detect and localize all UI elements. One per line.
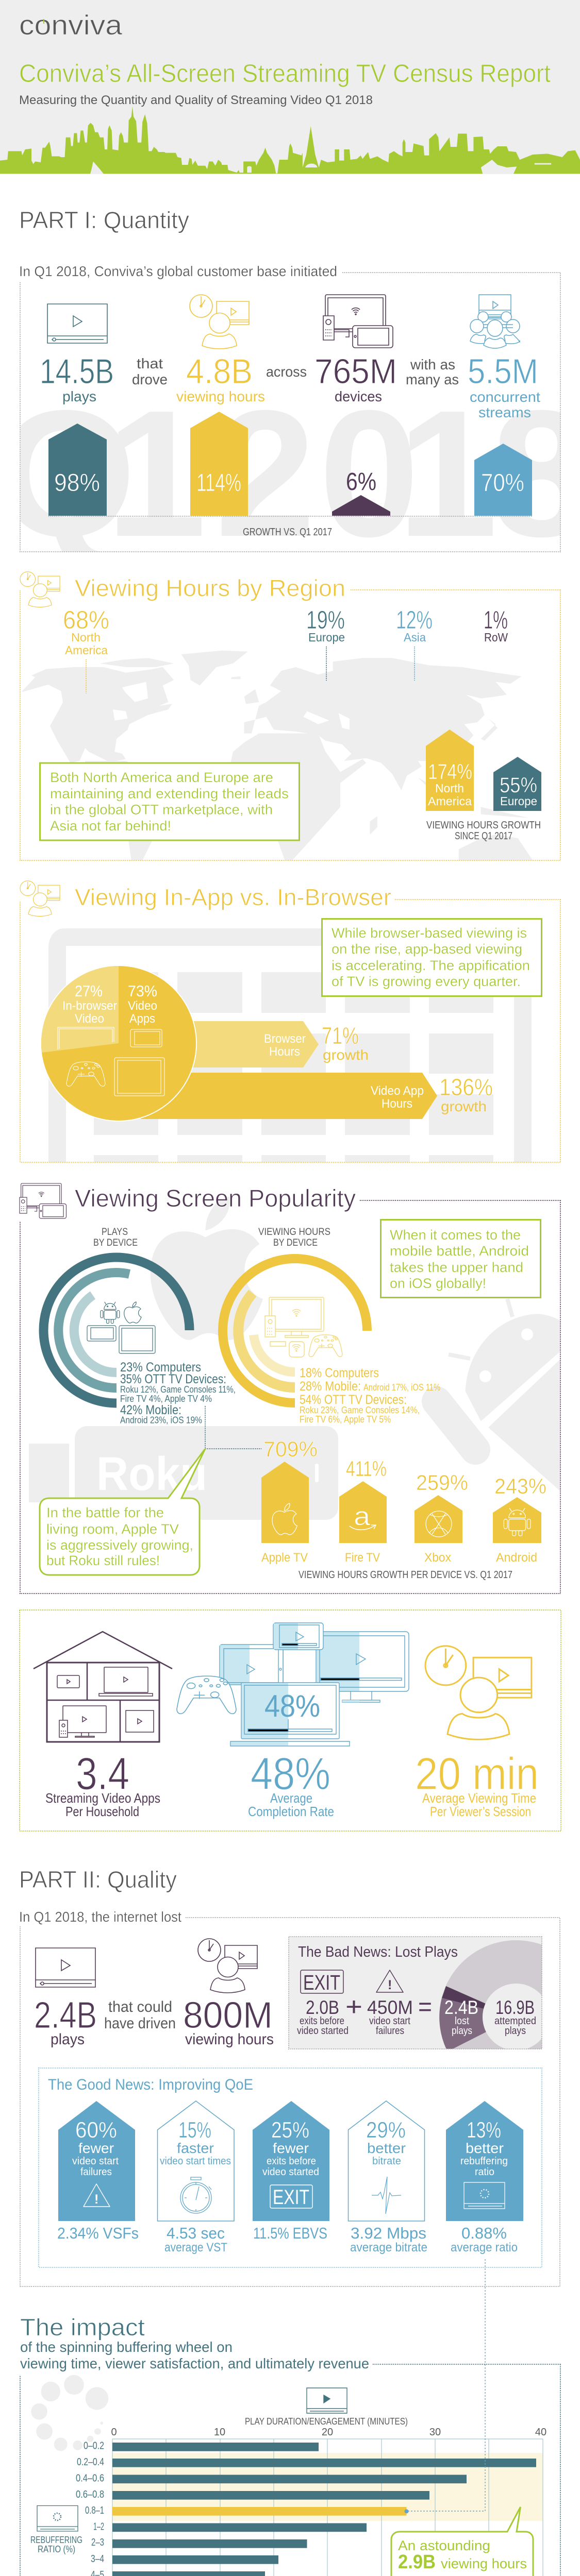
header background and skyline [0,0,580,174]
equation: attempted [494,2015,536,2027]
section heading: viewing time, viewer satisfaction, and ultimately revenue [20,2355,369,2371]
stat: apps per household: 3.4 [76,1748,129,1799]
callout [322,919,541,996]
connecting words: with as [410,357,455,372]
device icons [87,1302,155,1353]
legend: 23% Computers [120,1360,201,1375]
region: north america: 68% [63,606,109,634]
callout: roku: In the battle for the [46,1505,164,1520]
equation: exits before [300,2015,344,2027]
chart: viewing hours by device: BY DEVICE [273,1238,318,1248]
caption: VIEWING HOURS GROWTH PER DEVICE VS. Q1 2017 [299,1569,512,1581]
stat row: 14.5B [40,352,114,391]
region: europe: 19% [306,606,345,634]
metric: bitrate: 29% [366,2117,406,2143]
connector from good news to chart [404,2259,485,2513]
title: Conviva’s All-Screen Streaming TV Census Report [19,60,551,88]
callout: roku: living room, Apple TV [46,1521,179,1537]
growth arrows: Europe [500,794,537,808]
growth: android: Android [496,1551,537,1565]
stat labels: streams [478,404,531,420]
callout: roku [40,1449,205,1575]
icon: blue device cluster at 48 percent [177,1623,409,1746]
legend: Android 17%, iOS 11% [363,1382,440,1393]
icon: house with screens [34,1632,172,1742]
panel: viewing hours by region [20,572,560,860]
callout: viewing hours [441,2556,527,2571]
legend: 35% OTT TV Devices: [120,1372,226,1386]
metric: rebuffering ratio: ratio [475,2166,494,2178]
callout: 2.9B [398,2551,436,2573]
pie chart: in-app vs in-browser [40,965,197,1122]
caption: SINCE Q1 2017 [455,831,512,842]
equation: 2.0B [306,1997,339,2018]
callout: of TV is growing every quarter. [332,974,521,989]
metric: rebuffering ratio: 13% [467,2117,501,2143]
watermark: Q1 2018: 0 [319,373,419,574]
metric: video start times: average VST [164,2241,227,2255]
axis labels [111,2427,546,2438]
icons in pie [58,1027,164,1096]
stat: lost plays and hours: 800M [183,1995,273,2036]
metric: exits before video started: fewer [273,2140,309,2156]
connecting words: drove [132,371,168,387]
heading: part 1: PART I: Quantity [19,207,189,233]
legend [300,1366,440,1425]
axis labels: 40 [535,2427,546,2438]
metric: rebuffering ratio: average ratio [451,2241,518,2255]
icon: clock and viewer [190,295,249,349]
callout [40,763,299,840]
growth: xbox: 259% [416,1470,468,1495]
growth arrows [48,412,532,516]
metric: video start times: video start times [160,2156,231,2167]
conviva logo: conviva [19,10,123,41]
growth arrows: 114% [196,469,241,497]
legend [120,1360,236,1425]
metric: video start failures: ! [94,2192,98,2207]
background: android [437,1299,566,1496]
background: roku [29,1426,338,1520]
metric: video start failures: 2.34% VSFs [57,2224,139,2242]
legend: 18% Computers [300,1366,379,1380]
stat row [40,352,538,391]
row labels: 0–0.2 [84,2440,104,2451]
stat: lost plays and hours: that could [108,1998,172,2015]
callout: android [380,1220,540,1297]
metric: rebuffering ratio: 0.88% [461,2224,507,2242]
watermark: Q1 2018: 2 [216,373,316,574]
metric: video start failures: 60% [75,2117,117,2143]
stat: viewing time: 20 min [415,1748,539,1799]
world map [22,651,533,860]
section heading [20,2314,369,2371]
growth: android: 243% [494,1474,546,1498]
subtitle: Measuring the Quantity and Quality of Streaming Video Q1 2018 [19,93,373,107]
bar: video app hours: 136% [439,1074,493,1100]
callout: android: mobile battle, Android [390,1243,529,1259]
axis labels: 20 [322,2427,333,2438]
stat: lost plays and hours: 2.4B [34,1995,97,2036]
stat: viewing time: Per Viewer’s Session [430,1804,531,1819]
connecting words: across [266,364,307,380]
legend: Fire TV 6%, Apple TV 5% [300,1414,391,1425]
icon: concurrent viewers [470,295,520,348]
row labels: 0.2–0.4 [77,2456,104,2468]
metric: video start failures: fewer [78,2140,114,2156]
icon: play screen [307,2388,347,2413]
region: rest of world [484,606,508,644]
row labels: 0.4–0.6 [76,2473,104,2484]
watermark: Q1 2018 [21,410,560,552]
pie chart: in-app vs in-browser: Apps [129,1012,155,1026]
icon: exit sign: EXIT [303,1971,340,1994]
metric: exits before video started: EXIT [273,2186,309,2209]
bar: browser hours: growth [323,1047,369,1063]
growth: apple tv: Apple TV [261,1551,308,1565]
metric: video start times [158,2101,234,2255]
region: asia [396,606,433,681]
icon: buffering screen [37,2506,78,2531]
metric: bitrate: average bitrate [350,2241,427,2255]
equation: video start [369,2015,410,2027]
legend: 28% Mobile: [300,1379,361,1394]
region: north america: North [71,631,101,644]
equation: plays [505,2025,526,2037]
growth: fire tv [339,1456,387,1565]
bar: video app hours: Video App [371,1084,424,1098]
stat labels: plays [62,388,96,404]
metric: video start failures: video start [72,2156,119,2167]
bar: browser hours: Hours [269,1045,300,1059]
icon: clock and viewer [198,1939,257,1993]
callout [391,2507,533,2576]
pie chart: in-app vs in-browser: In-browser [62,999,117,1013]
metric: video start times: faster [177,2140,214,2156]
pie chart: in-app vs in-browser: 27% [75,982,103,1000]
equation: 16.9B [495,1997,535,2018]
bar: browser hours: Browser [264,1032,306,1046]
row labels: 0.6–0.8 [76,2489,104,2500]
growth: fire tv: 411% [346,1456,387,1481]
icon: warning [376,1970,403,1992]
row labels: 2–3 [91,2537,104,2548]
legend: Fire TV 4%, Apple TV 4% [120,1394,212,1404]
metric: exits before video started [253,2101,329,2242]
stat: apps per household: Per Household [65,1804,139,1819]
stat row: 765M [314,352,397,391]
watermark: Q1 2018: 1 [106,373,206,574]
section heading: Viewing Hours by Region [75,575,345,601]
city skyline [0,107,580,174]
growth arrows: 98% [54,469,100,497]
panel: bad news [288,1936,542,2049]
stat: completion rate: Average [270,1790,312,1806]
stat labels: concurrent [470,389,540,405]
equation: video started [297,2025,349,2037]
axis title: PLAY DURATION/ENGAGEMENT (MINUTES) [245,2416,408,2427]
bars [112,2443,536,2576]
heading: part 2: PART II: Quality [19,1866,177,1893]
stat: viewing time: Average Viewing Time [422,1790,536,1806]
stat row: 4.8B [186,352,253,391]
legend: 42% Mobile: [120,1403,181,1417]
icon: clock and viewer [20,881,60,916]
background logos [29,1196,566,1520]
stat: viewing time [415,1748,539,1819]
equation: 2.4B [444,1997,478,2018]
equation: failures [376,2025,404,2037]
growth: apple tv [261,1437,318,1565]
stat: lost plays and hours [34,1995,274,2048]
growth arrows: North [435,782,464,795]
metric: exits before video started: video started [262,2166,319,2178]
panel: good news: The Good News: Improving QoE [48,2076,253,2093]
equation [297,1992,536,2037]
panel: internet lost [19,1909,580,2286]
callout: roku: but Roku still rules! [46,1553,160,1568]
stat labels [62,388,540,420]
pie chart: in-app vs in-browser: 73% [128,982,157,1000]
callout: android: on iOS globally! [390,1276,486,1291]
icon: clock and viewer [20,572,60,607]
stat: lost plays and hours: plays [51,2031,85,2048]
background: apple [151,1196,263,1340]
region: asia: 12% [396,606,433,634]
growth: fire tv: a [354,1502,370,1531]
metric: rebuffering ratio: rebuffering [460,2156,508,2167]
chart: viewing hours by device [223,1227,440,1425]
panel: the impact of buffering [20,2259,560,2576]
metric: exits before video started: 25% [271,2117,309,2143]
equation: + [345,1992,362,2021]
stat: lost plays and hours: viewing hours [185,2031,274,2048]
metric: exits before video started: 11.5% EBVS [253,2224,327,2242]
growth: android [493,1474,546,1565]
chart: plays by device: BY DEVICE [93,1238,138,1248]
growth arrows: 55% [500,773,537,797]
legend: Android 23%, iOS 19% [120,1415,202,1425]
section heading: The impact [20,2314,145,2341]
icon: devices [323,295,393,348]
region: europe: Europe [308,631,345,644]
callout: is accelerating. The appification [332,958,530,973]
bar: video app hours: growth [441,1098,487,1114]
legend: Roku 12%, Game Consoles 11%, [120,1384,236,1395]
legend: 54% OTT TV Devices: [300,1393,407,1407]
bar: video app hours [141,1073,493,1119]
stat: completion rate [248,1748,334,1819]
equation: 450M [367,1997,413,2018]
stat labels: devices [335,388,382,404]
growth arrows: 174% [428,759,472,784]
chart: viewing hours by device: VIEWING HOURS [258,1227,330,1238]
caption [426,820,541,842]
growth arrows [426,730,541,811]
caption: VIEWING HOURS GROWTH [426,820,541,831]
growth arrows: America [428,794,472,808]
chart: plays by device: PLAYS [102,1227,128,1238]
stat: completion rate: 48% [251,1748,330,1799]
axis labels: 10 [214,2427,225,2438]
callout: Both North America and Europe are [50,770,273,785]
region: asia: Asia [404,631,426,644]
callout: on the rise, app-based viewing [332,941,522,957]
pie chart: in-app vs in-browser: Video [75,1012,104,1026]
watermark: Q1 2018: 1 [397,373,498,574]
stat: apps per household: Streaming Video Apps [45,1790,160,1806]
equation: lost [455,2015,469,2027]
section heading: Viewing Screen Popularity [75,1184,356,1212]
background: roku: Roku [96,1448,207,1500]
equation: plays [452,2025,472,2037]
axis title: REBUFFERING [30,2535,82,2545]
watermark: Q1 2018: Q [0,373,136,574]
background tablet [48,928,532,1162]
pie chart: in-app vs in-browser: Video [128,999,157,1013]
icon: play screen [47,304,107,343]
callout: maintaining and extending their leads [50,786,289,802]
axis labels: 30 [429,2427,441,2438]
metric: video start failures [57,2101,139,2242]
panel: bad news: The Bad News: Lost Plays [298,1944,458,1960]
metric: rebuffering ratio: better [466,2140,504,2156]
device icons [265,1297,342,1357]
axis labels: 0 [111,2427,117,2438]
connecting words [132,355,459,387]
icon: devices [20,1183,66,1218]
callout: While browser-based viewing is [332,925,527,941]
icon: play screen [36,1948,95,1987]
icon: blue device cluster at 48 percent: 48% [264,1689,320,1723]
region: europe [306,606,345,681]
axis title: RATIO (%) [38,2544,75,2554]
stat: lost plays and hours: have driven [104,2015,176,2032]
panel: viewing in-app vs in-browser [20,881,560,1162]
region: rest of world: 1% [484,606,508,634]
row labels: 1–2 [93,2521,104,2533]
metric: video start failures: failures [80,2166,112,2178]
connecting words: many as [406,371,459,387]
panel: good news [39,2068,542,2267]
row labels: 3–4 [91,2553,104,2565]
growth: xbox [415,1470,468,1565]
metric: video start times: 4.53 sec [167,2224,225,2242]
metric: bitrate [349,2101,427,2255]
panel: global customer base [20,266,561,552]
stat labels: viewing hours [176,388,265,404]
section heading: Viewing In-App vs. In-Browser [75,884,391,910]
growth: xbox: Xbox [424,1551,451,1565]
section heading: of the spinning buffering wheel on [20,2339,233,2355]
background spinner [31,2375,108,2451]
growth: apple tv: 709% [263,1437,318,1461]
metric: bitrate: bitrate [372,2156,401,2167]
metric: video start times: 15% [178,2117,211,2143]
equation: = [418,1992,432,2021]
callout: android: When it comes to the [390,1227,521,1243]
callout: roku: is aggressively growing, [46,1537,193,1553]
growth arrows: 70% [481,469,524,497]
panel: household, completion and session stats [20,1610,561,1831]
metric: rebuffering ratio [446,2101,523,2255]
region: north america: America [65,643,108,657]
callout: An astounding [398,2538,490,2553]
row labels [76,2440,104,2576]
metric: bitrate: better [367,2140,406,2156]
callout: in the global OTT marketplace, with [50,802,273,817]
growth arrows: 6% [346,468,376,496]
caption: GROWTH VS. Q1 2017 [243,527,332,538]
bar: video app hours: Hours [382,1097,412,1111]
callout: android: takes the upper hand [390,1260,523,1275]
stat row: 5.5M [468,352,538,391]
metric: exits before video started: exits before [267,2156,316,2167]
legend: Roku 23%, Game Consoles 14%, [300,1405,420,1415]
panel heading: In Q1 2018, the internet lost [19,1909,181,1925]
panel heading: In Q1 2018, Conviva’s global customer base initiated [19,263,337,279]
donut chart: lost plays [439,1940,542,2049]
region: north america [63,606,109,693]
growth: fire tv: Fire TV [345,1551,380,1565]
stat: apps per household [45,1748,160,1819]
chart: plays by device [44,1227,236,1425]
icon: warning: ! [388,1978,392,1992]
region: rest of world: RoW [484,631,508,644]
connecting words: that [137,355,163,371]
bar chart: rebuffering vs engagement [76,2427,546,2576]
row labels: 0.8–1 [85,2505,104,2516]
bar: browser hours [186,1021,369,1067]
panel: viewing screen popularity [20,1183,566,1594]
metric: bitrate: 3.92 Mbps [351,2224,426,2242]
axis title [30,2535,82,2554]
icon: clock and viewer [425,1646,532,1739]
callout: Asia not far behind! [50,818,171,834]
stat: completion rate: Completion Rate [248,1804,334,1819]
bar: browser hours: 71% [322,1022,359,1049]
